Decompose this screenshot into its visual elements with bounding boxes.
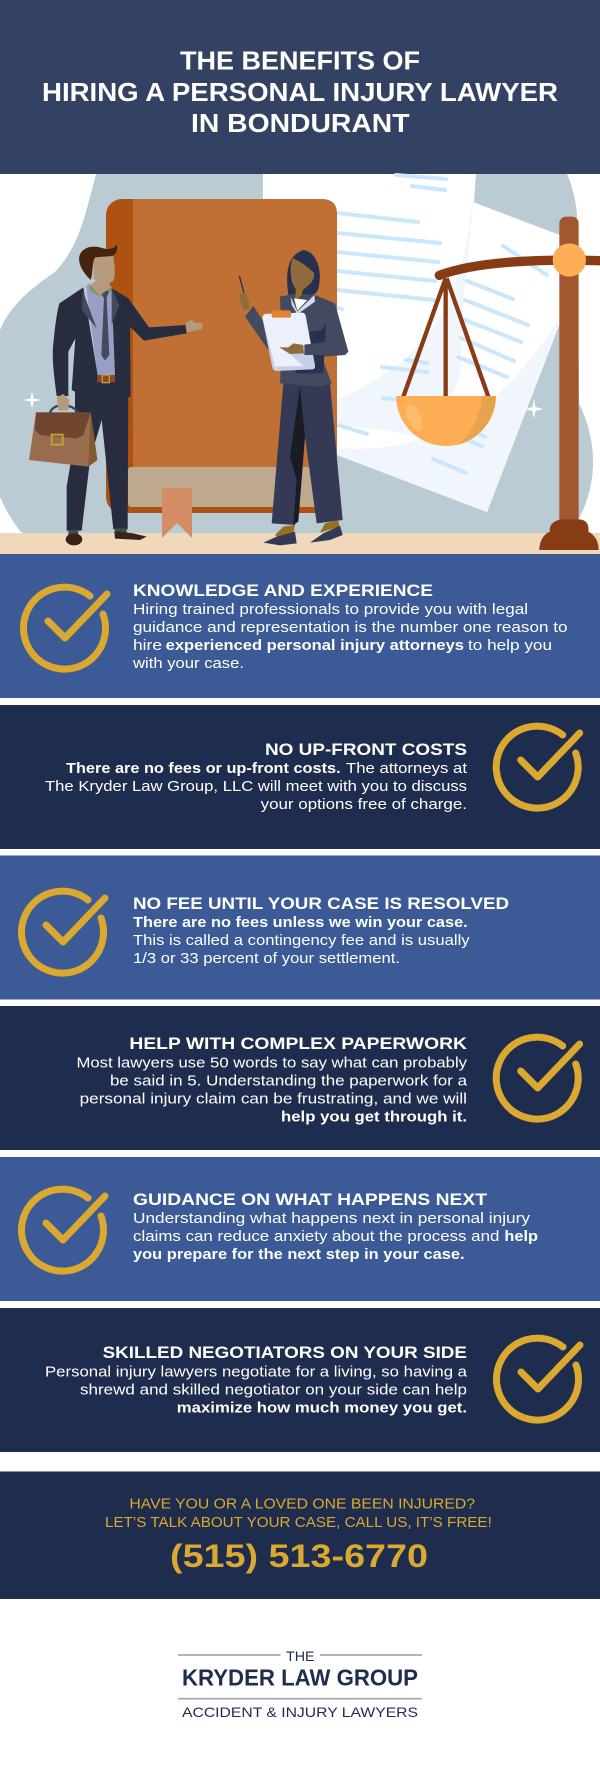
icon: check circle	[22, 1189, 105, 1271]
call to action text	[105, 1496, 492, 1531]
text: knowledge and experience: KNOWLEDGE AND EXPERIENCE	[133, 581, 433, 600]
panel: knowledge and experience	[0, 554, 600, 698]
text: no up-front costs: your options free of charge.	[261, 796, 467, 813]
text: guidance	[133, 1190, 538, 1263]
text: complex paperwork: Most lawyers use 50 words to say what can probably	[76, 1054, 468, 1072]
text: knowledge and experience	[132, 581, 568, 672]
text: knowledge and experience: experienced personal injury attorneys	[166, 637, 464, 654]
text: no up-front costs: The Kryder Law Group, LLC will meet with you to discuss	[45, 778, 467, 795]
text: skilled negotiators	[45, 1343, 468, 1416]
icon: check circle	[496, 726, 580, 808]
call to action panel	[0, 1472, 600, 1599]
woman with clipboard	[238, 250, 348, 545]
logo	[178, 1648, 422, 1720]
text: guidance: help	[504, 1228, 538, 1245]
logo: ACCIDENT & INJURY LAWYERS	[182, 1704, 418, 1720]
bookmark	[162, 488, 192, 538]
icon: check circle	[22, 891, 105, 973]
text: no fee until resolved: There are no fees unless we win your case.	[133, 914, 468, 931]
phone number: (515) 513-6770	[170, 1538, 428, 1574]
panel: skilled negotiators	[0, 1308, 600, 1452]
text: knowledge and experience: Hiring trained professionals to provide you with legal	[133, 601, 528, 618]
icon: check circle	[24, 587, 107, 669]
text: guidance: Understanding what happens next in personal injury	[133, 1210, 531, 1227]
illustration panel	[0, 174, 600, 554]
call to action text: HAVE YOU OR A LOVED ONE BEEN INJURED?	[129, 1496, 475, 1512]
ground	[0, 533, 600, 554]
text: skilled negotiators: shrewd and skilled negotiator on your side can help	[80, 1382, 467, 1398]
text: guidance: you prepare for the next step in your case.	[133, 1246, 465, 1263]
text: guidance: claims can reduce anxiety about the process and	[133, 1228, 499, 1245]
panel: complex paperwork	[0, 1006, 600, 1150]
sparkles	[23, 391, 543, 419]
book	[106, 199, 337, 538]
title	[42, 46, 558, 138]
text: complex paperwork: be said in 5. Understanding the paperwork for a	[110, 1072, 468, 1090]
logo: THE	[286, 1648, 315, 1664]
text: complex paperwork: HELP WITH COMPLEX PAPERWORK	[129, 1034, 468, 1053]
text: complex paperwork: help you get through it.	[281, 1108, 467, 1126]
logo: KRYDER LAW GROUP	[182, 1665, 418, 1691]
text: no up-front costs: The attorneys at	[346, 760, 468, 777]
text: skilled negotiators: Personal injury lawyers negotiate for a living, so having a	[45, 1364, 468, 1380]
icon: check circle	[497, 1338, 580, 1420]
text: guidance: GUIDANCE ON WHAT HAPPENS NEXT	[133, 1190, 488, 1209]
text: no up-front costs	[45, 740, 468, 813]
header panel	[0, 0, 600, 174]
call to action text: LET’S TALK ABOUT YOUR CASE, CALL US, IT’S FREE!	[105, 1514, 492, 1531]
title: THE BENEFITS OF	[180, 46, 420, 76]
text: knowledge and experience: with your case.	[132, 655, 244, 672]
text: no fee until resolved: NO FEE UNTIL YOUR CASE IS RESOLVED	[133, 894, 509, 913]
text: complex paperwork: personal injury claim can be frustrating, and we will	[80, 1090, 467, 1108]
text: skilled negotiators: maximize how much money you get.	[177, 1400, 467, 1416]
briefcase	[29, 405, 97, 467]
text: skilled negotiators: SKILLED NEGOTIATORS ON YOUR SIDE	[103, 1343, 467, 1362]
background blob	[0, 174, 593, 533]
panel: no up-front costs	[0, 705, 600, 849]
balance scale	[396, 217, 600, 550]
text: complex paperwork	[76, 1034, 468, 1126]
text: no up-front costs: NO UP-FRONT COSTS	[265, 740, 467, 759]
text: no fee until resolved: 1/3 or 33 percent of your settlement.	[133, 950, 400, 967]
clipboard	[263, 310, 315, 371]
title: HIRING A PERSONAL INJURY LAWYER	[42, 77, 558, 107]
text: no fee until resolved	[133, 894, 509, 967]
text: knowledge and experience: hire	[133, 637, 162, 654]
panel: guidance	[0, 1157, 600, 1301]
title: IN BONDURANT	[191, 108, 410, 138]
panel: no fee until resolved	[0, 856, 600, 1000]
text: no up-front costs: There are no fees or up-front costs.	[66, 760, 341, 777]
text: knowledge and experience: guidance and representation is the number one reason to	[133, 619, 568, 636]
paper sheets	[262, 174, 565, 512]
man with briefcase	[29, 244, 203, 545]
text: no fee until resolved: This is called a contingency fee and is usually	[133, 932, 470, 949]
icon: check circle	[496, 1037, 580, 1119]
text: knowledge and experience: to help you	[468, 637, 552, 654]
